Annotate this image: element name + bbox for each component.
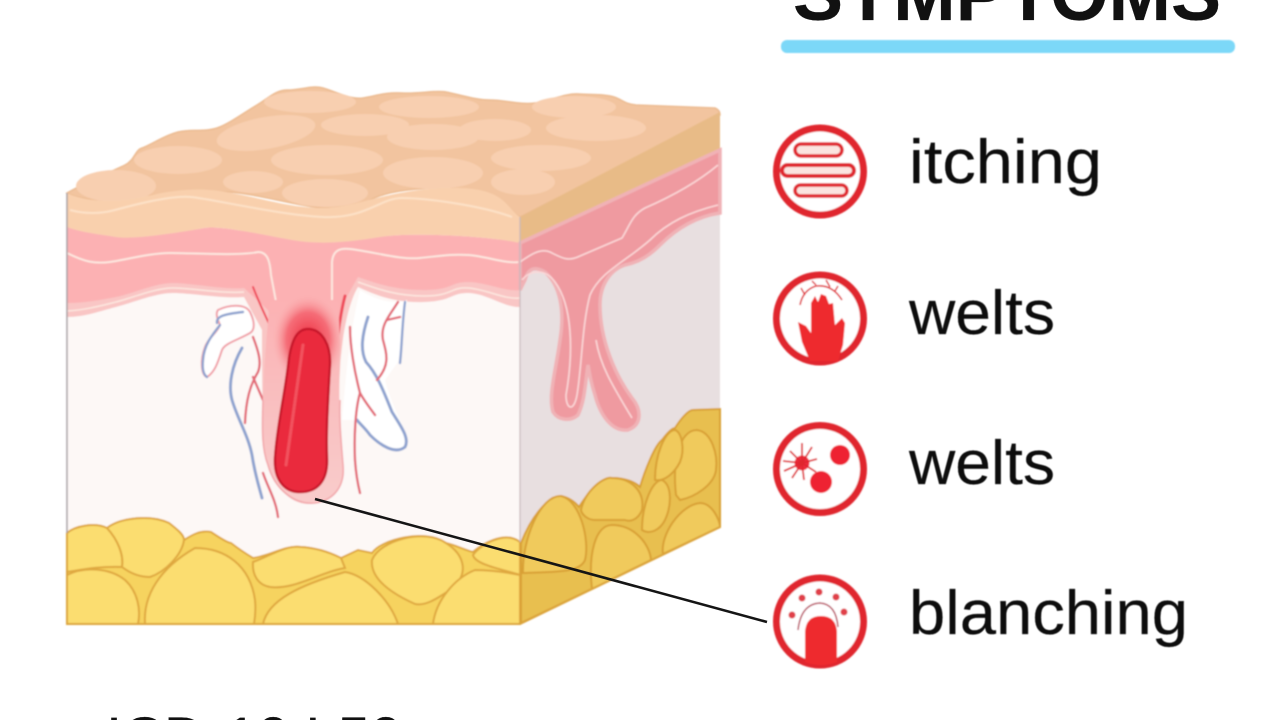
heading underline bbox=[781, 40, 1235, 53]
symptom row: itching bbox=[776, 128, 1102, 215]
icon: rash spots bbox=[776, 426, 864, 512]
top skin surface bbox=[67, 87, 720, 217]
front fat layer bbox=[67, 518, 520, 624]
label: blanching: blanching bbox=[909, 579, 1188, 648]
symptom row: blanching bbox=[776, 578, 1188, 665]
wheal highlight bbox=[286, 345, 303, 465]
block edges bbox=[66, 193, 68, 533]
label: welts: welts bbox=[908, 279, 1055, 348]
symptom row: welts with spots bbox=[776, 426, 1055, 512]
epidermis highlight bbox=[70, 197, 512, 217]
leader line to blanching icon bbox=[315, 499, 767, 622]
label: itching: itching bbox=[909, 128, 1102, 197]
skin cross-section diagram bbox=[67, 87, 720, 624]
white lines in dermis bbox=[67, 249, 520, 311]
blood vessels bbox=[203, 287, 406, 517]
sheath lower outline bbox=[263, 400, 343, 503]
left white gland bbox=[202, 306, 254, 377]
right white gland bbox=[342, 290, 408, 451]
symptom row: welts with hand bbox=[776, 275, 1055, 362]
right side tan band bbox=[520, 112, 720, 243]
front pink dermis layer bbox=[67, 227, 520, 350]
front pale lower band of epidermis bbox=[67, 225, 520, 504]
right side white lines bbox=[520, 165, 718, 418]
front face dermis bbox=[67, 230, 520, 624]
icon: scratching hand bbox=[776, 275, 864, 362]
side fat layer bbox=[521, 409, 720, 623]
right side face base bbox=[520, 112, 720, 624]
icon: itching stripes bbox=[776, 128, 864, 215]
front epidermis band bbox=[67, 188, 520, 243]
follicle pale sheath bbox=[262, 300, 343, 503]
label: welts: welts bbox=[908, 429, 1055, 498]
inflammation glow bbox=[272, 294, 344, 386]
right side pink layer and fork bbox=[520, 150, 720, 430]
icon: pressed finger bbox=[776, 578, 864, 665]
red wheal bbox=[275, 329, 330, 492]
